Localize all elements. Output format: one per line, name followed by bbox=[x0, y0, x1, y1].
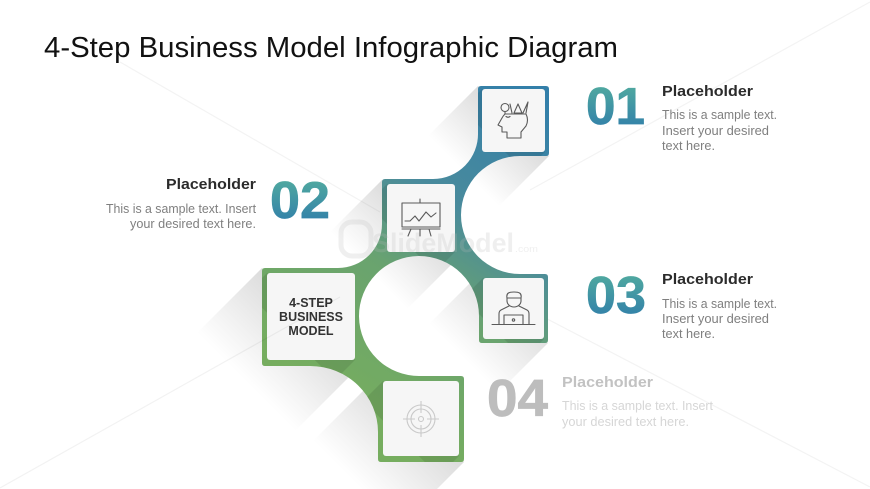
step 02 text: This is a sample text. Insert bbox=[106, 202, 257, 216]
watermark: .com bbox=[515, 244, 538, 255]
watermark bbox=[341, 222, 538, 258]
step 02 number: 02 bbox=[270, 172, 330, 230]
centre label: BUSINESS bbox=[279, 310, 343, 324]
step 02 text bbox=[106, 176, 257, 231]
step 03 text bbox=[662, 271, 777, 341]
step 04 number: 04 bbox=[487, 370, 548, 428]
title: 4-Step Business Model Infographic Diagram bbox=[44, 32, 618, 64]
icon: head with ideas bbox=[498, 102, 528, 138]
step 02 text: your desired text here. bbox=[130, 217, 256, 231]
step 01 text: Placeholder bbox=[662, 83, 753, 100]
panel: step 03 card bbox=[483, 278, 544, 339]
panel: centre card bbox=[267, 273, 355, 360]
icon: person at laptop bbox=[492, 292, 535, 324]
step 03 number: 03 bbox=[586, 267, 646, 325]
step 01 text: This is a sample text. bbox=[662, 108, 777, 122]
centre label: 4-STEP bbox=[289, 296, 333, 310]
inner square shadows on band bbox=[247, 89, 545, 476]
connected four-square band bbox=[262, 86, 549, 462]
step 01 number: 01 bbox=[586, 78, 645, 136]
watermark: SlideModel bbox=[372, 228, 514, 258]
icon: target bbox=[403, 401, 439, 437]
step 01 text bbox=[662, 83, 777, 153]
step 01 text: text here. bbox=[662, 139, 715, 153]
panel: step 02 card bbox=[387, 184, 455, 252]
step 04 text: This is a sample text. Insert bbox=[562, 399, 714, 413]
step 02 text: Placeholder bbox=[166, 176, 256, 193]
step 01 text: Insert your desired bbox=[662, 124, 769, 138]
panel: step 04 card bbox=[383, 381, 459, 456]
step 03 text: text here. bbox=[662, 327, 715, 341]
long shadows bbox=[197, 86, 549, 489]
icon: presentation board bbox=[402, 199, 440, 236]
step 03 text: Placeholder bbox=[662, 271, 753, 288]
step 04 text: your desired text here. bbox=[562, 415, 689, 429]
centre label: MODEL bbox=[288, 324, 334, 338]
panel: step 01 card bbox=[482, 89, 545, 152]
step 04 text: Placeholder bbox=[562, 374, 653, 391]
step 04 text bbox=[562, 374, 714, 429]
faint diagonal line over centre card bbox=[0, 297, 340, 488]
step 03 text: This is a sample text. bbox=[662, 297, 777, 311]
step 03 text: Insert your desired bbox=[662, 312, 769, 326]
